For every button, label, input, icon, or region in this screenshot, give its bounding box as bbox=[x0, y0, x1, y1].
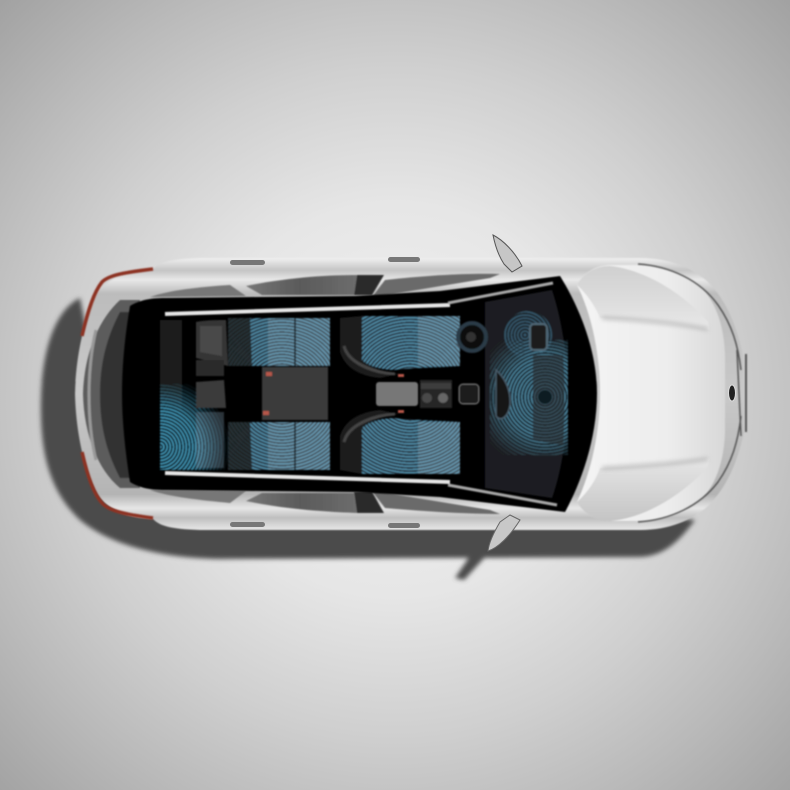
rear floor small red markers bbox=[263, 372, 404, 415]
door handles bbox=[230, 257, 420, 528]
rear seat light overlays bbox=[268, 318, 330, 470]
hood crease shadows bbox=[602, 318, 708, 468]
car body bbox=[75, 258, 744, 530]
rear glass and hatch bbox=[83, 300, 140, 488]
door mirror bottom bbox=[488, 515, 520, 551]
third row seat highlight bbox=[200, 326, 222, 356]
hood bbox=[577, 265, 725, 521]
tail light top bbox=[82, 269, 153, 336]
kia badge bbox=[728, 385, 736, 401]
front seat bolsters bbox=[340, 316, 398, 474]
tail light bottom bbox=[82, 452, 153, 518]
rear floor bbox=[262, 367, 328, 420]
gear shifter bbox=[459, 384, 479, 404]
front grille edge bbox=[638, 264, 746, 522]
front seat bolster highlights bbox=[344, 346, 395, 442]
instrument cluster cowl bbox=[530, 324, 547, 350]
front seat bottom bbox=[362, 418, 460, 474]
center console bbox=[376, 382, 418, 406]
windshield wiper panel bbox=[533, 355, 564, 445]
hood crease top bbox=[577, 266, 710, 330]
steering wheel bbox=[458, 323, 486, 351]
rear speaker rings bbox=[160, 384, 228, 470]
cargo floor bbox=[160, 320, 182, 470]
dash speaker bbox=[538, 390, 552, 404]
dash top speaker rings bbox=[504, 311, 552, 359]
front seat top bbox=[362, 316, 460, 370]
third row seat overlay bbox=[196, 412, 224, 468]
front seat light overlay bbox=[418, 316, 460, 474]
door mirror top bbox=[493, 235, 522, 272]
side windows bottom bbox=[150, 490, 500, 514]
third row seat lower bbox=[196, 380, 226, 408]
dash center speaker rings bbox=[490, 340, 568, 455]
third row seat strap bbox=[196, 360, 224, 376]
dashboard bbox=[485, 290, 568, 498]
cabin interior bbox=[160, 290, 568, 498]
cup holders bbox=[420, 380, 452, 408]
side windows top bbox=[150, 274, 500, 297]
hood crease bottom bbox=[577, 458, 710, 521]
rear seat bottom bbox=[228, 422, 330, 470]
rear seat top bbox=[228, 318, 330, 366]
center stack bbox=[496, 370, 510, 419]
rear seat splits bbox=[294, 318, 296, 470]
roof rails bbox=[165, 283, 557, 505]
rear seat dark side patches bbox=[228, 318, 252, 470]
open cabin bbox=[122, 276, 597, 512]
third row seats bbox=[196, 320, 228, 366]
car shadow bbox=[41, 298, 695, 580]
